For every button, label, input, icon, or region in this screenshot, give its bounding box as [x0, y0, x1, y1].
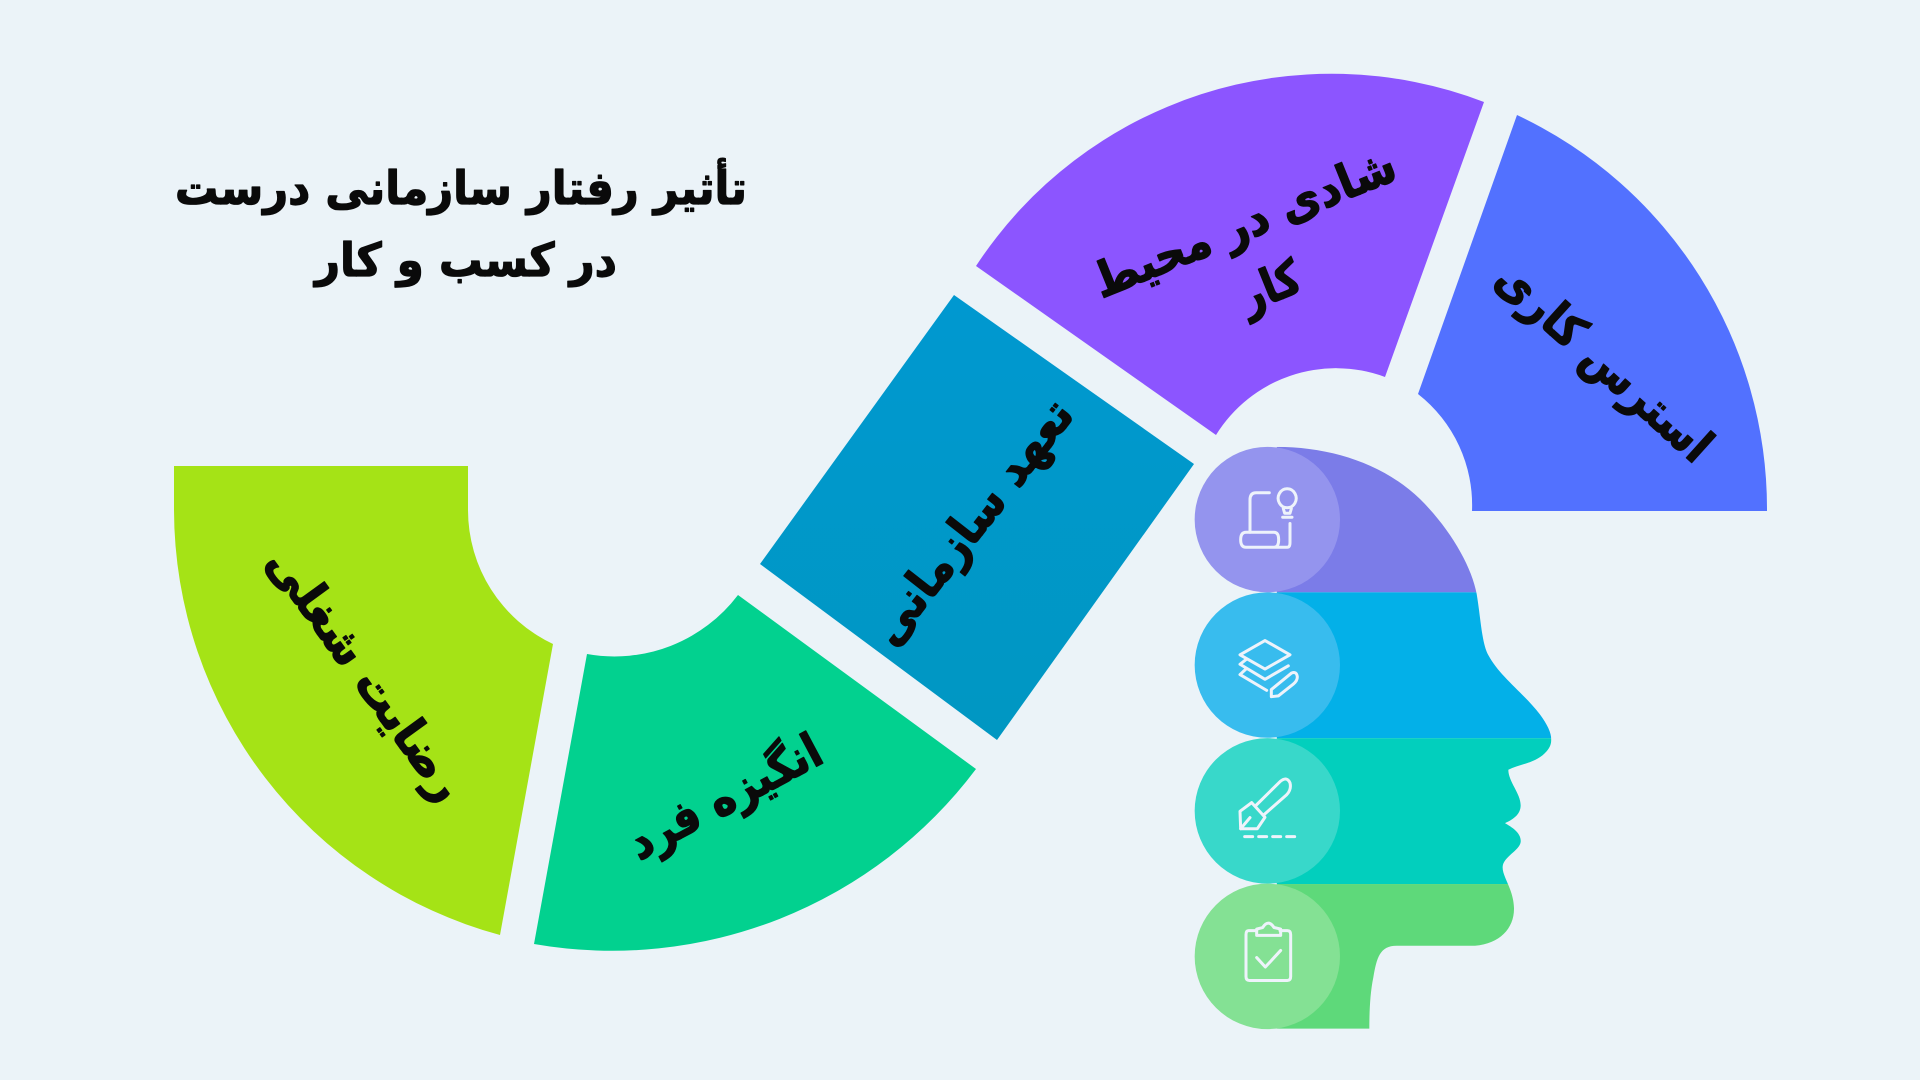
label: work stress: استرس کاری [1484, 250, 1724, 474]
segment: job satisfaction (lime) [174, 466, 553, 935]
title: در کسب و کار [313, 233, 617, 287]
label: organizational commitment: تعهد سازمانی [859, 388, 1085, 656]
segment: individual motivation (green) [534, 595, 976, 951]
circle: blue [1195, 592, 1340, 738]
icon: clipboard with check [1246, 923, 1291, 980]
circle: green [1195, 884, 1340, 1029]
circle: teal [1195, 738, 1340, 884]
label: workplace happiness: شادی در محیط [1085, 137, 1404, 310]
infographic canvas [174, 74, 1767, 1030]
head colored bands [1276, 447, 1552, 1029]
segment: work stress (blue) [1418, 115, 1767, 511]
label: workplace happiness [1085, 137, 1430, 373]
icon: scroll with light bulb [1241, 489, 1296, 547]
label: workplace happiness: کار [1229, 249, 1309, 325]
title: تأثیر رفتار سازمانی درست [175, 158, 747, 215]
segment: workplace happiness (purple) [976, 74, 1484, 435]
icon: fountain pen [1240, 779, 1299, 837]
title [175, 158, 747, 287]
segment: organizational commitment (teal blue) [760, 295, 1194, 740]
head silhouette with icons [1195, 444, 1583, 1030]
label: individual motivation: انگیزه فرد [618, 723, 832, 871]
icon: layers with pencil [1240, 641, 1297, 697]
label: job satisfaction: رضایت شغلی [255, 536, 477, 812]
circle: purple [1195, 447, 1340, 592]
